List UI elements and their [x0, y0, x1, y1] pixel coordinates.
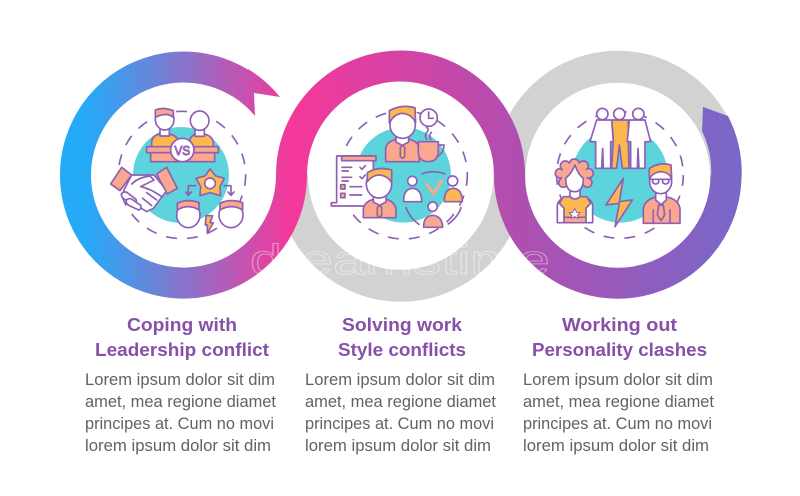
- icon: team and check: [404, 172, 462, 227]
- icon: person in front: [363, 168, 396, 218]
- column 2 heading: Solving work: [342, 314, 463, 335]
- icon: woman with curly hair: [555, 159, 593, 223]
- icon: three standing people: [590, 108, 651, 168]
- column 2 text: principes at. Cum no movi: [305, 415, 494, 433]
- icon: star and arrows: [186, 169, 234, 196]
- column 1 heading: Coping with: [127, 314, 237, 335]
- grey background ribbon: [292, 67, 726, 286]
- column 3 text: principes at. Cum no movi: [523, 415, 712, 433]
- column 1 text: lorem ipsum dolor sit dim: [85, 437, 271, 455]
- column 3 heading: [532, 314, 707, 360]
- icon: leadership conflict: [111, 108, 246, 239]
- column 1 heading: [95, 314, 269, 360]
- watermark: dreamstime: [250, 236, 550, 283]
- column 2 heading: [338, 314, 466, 360]
- column 1 text: [85, 371, 276, 455]
- icon: checklist document: [331, 156, 376, 206]
- column 3 text: [523, 371, 714, 455]
- column 3 heading: Personality clashes: [532, 339, 707, 360]
- column 2 text: Lorem ipsum dolor sit dim: [305, 371, 495, 389]
- column 2 text: [305, 371, 496, 455]
- icon: handshake: [111, 167, 177, 212]
- icon: man with glasses: [643, 164, 680, 223]
- icon: personality clashes: [555, 108, 683, 238]
- column 3 heading: Working out: [562, 314, 677, 335]
- icon: two heads and bolt: [177, 201, 243, 233]
- icon: work style conflicts: [331, 106, 467, 239]
- icon: person with coffee and clock: [386, 106, 444, 162]
- column 1 text: Lorem ipsum dolor sit dim: [85, 371, 275, 389]
- column 3 text: Lorem ipsum dolor sit dim: [523, 371, 713, 389]
- icon: lightning bolt: [606, 178, 632, 227]
- column 2 text: lorem ipsum dolor sit dim: [305, 437, 491, 455]
- column 2 heading: Style conflicts: [338, 339, 466, 360]
- gradient ribbon with arrow ends: [76, 66, 742, 283]
- column 1 text: principes at. Cum no movi: [85, 415, 274, 433]
- column 2 text: amet, mea regione diamet: [305, 393, 496, 411]
- column 3 text: lorem ipsum dolor sit dim: [523, 437, 709, 455]
- column 1 heading: Leadership conflict: [95, 339, 269, 360]
- column 3 text: amet, mea regione diamet: [523, 393, 714, 411]
- column 1 text: amet, mea regione diamet: [85, 393, 276, 411]
- icon: debating people and table: VS: [174, 143, 190, 158]
